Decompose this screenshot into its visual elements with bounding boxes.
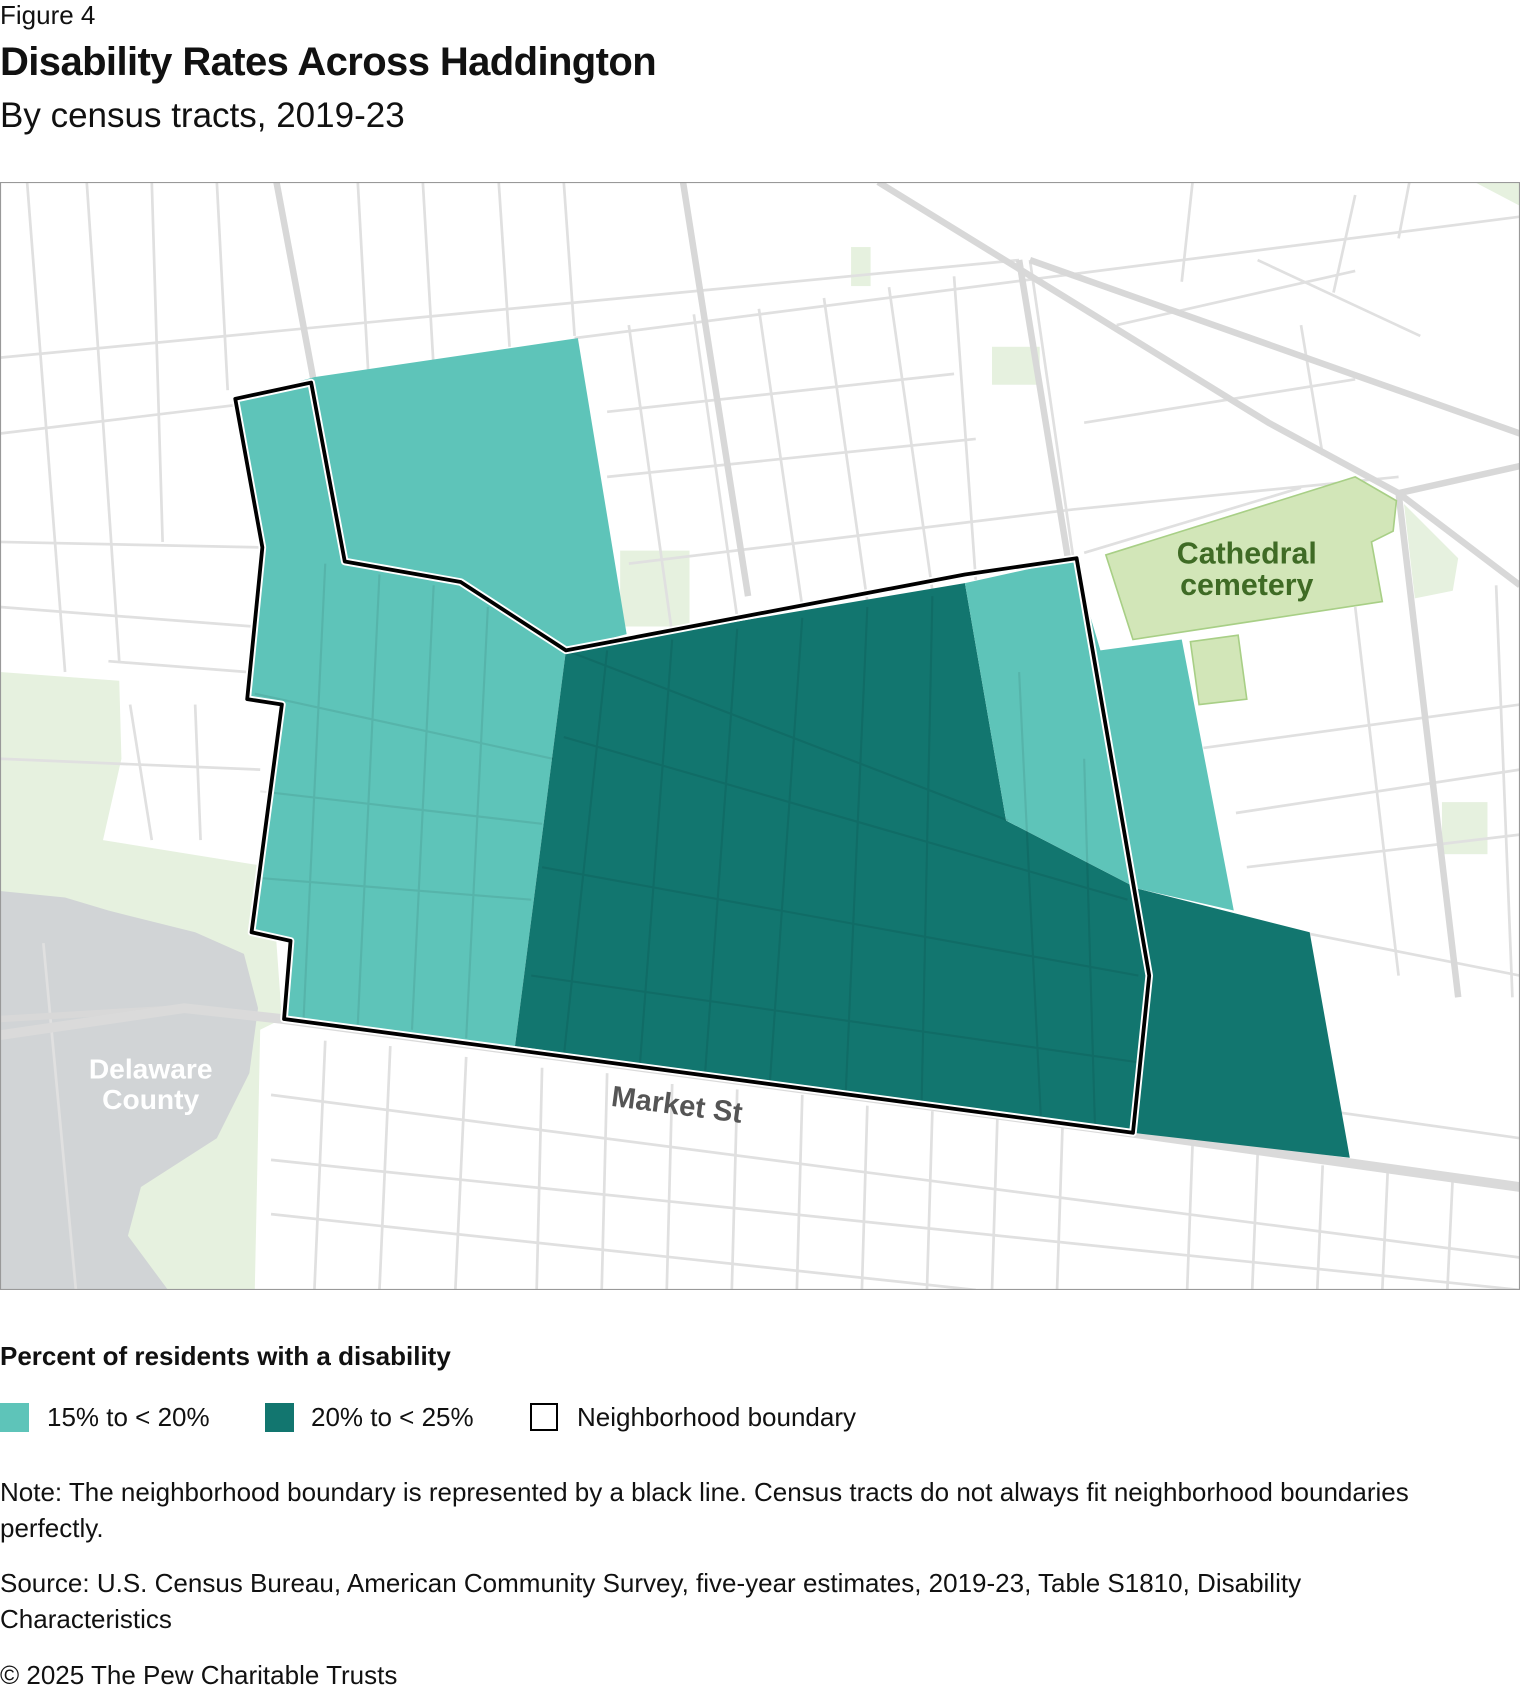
Cathedral cemetery: cemetery [1180,569,1314,602]
figure label: Figure 4 [0,0,95,30]
green park west [0,672,282,1290]
legend item: 20-25: 20% to < 25% [311,1402,474,1432]
Cathedral cemetery [1106,477,1396,705]
Market St road [0,1008,1520,1187]
Delaware County [0,891,258,1290]
legend [0,1402,856,1432]
subtitle: By census tracts, 2019-23 [0,96,405,135]
copyright: © 2025 The Pew Charitable Trusts [0,1660,397,1690]
neighborhood boundary [235,383,1149,1133]
Market St road: Market St [609,1081,745,1130]
map [0,182,1520,1290]
street grid [0,182,1520,1290]
legend title: Percent of residents with a disability [0,1341,451,1371]
tract: 20% to 25% [515,583,1350,1158]
tract: 15% to 20% east [965,559,1234,911]
Delaware County: County [102,1083,200,1115]
title: Disability Rates Across Haddington [0,40,656,84]
legend item: boundary: Neighborhood boundary [577,1402,856,1432]
source: Source: U.S. Census Bureau, American Community Survey, five-year estimates, 2019-23, Table S1810, Disability Characteristics [0,1568,1301,1634]
Delaware County: Delaware [89,1053,213,1085]
Cathedral cemetery: Cathedral [1177,538,1317,571]
note: Note: The neighborhood boundary is represented by a black line. Census tracts do not always fit neighborhood boundaries perfectly. [0,1477,1409,1543]
small green parks [620,551,690,627]
tract: 15% to 20% west [235,338,627,1046]
legend item: 15-20: 15% to < 20% [47,1402,210,1432]
